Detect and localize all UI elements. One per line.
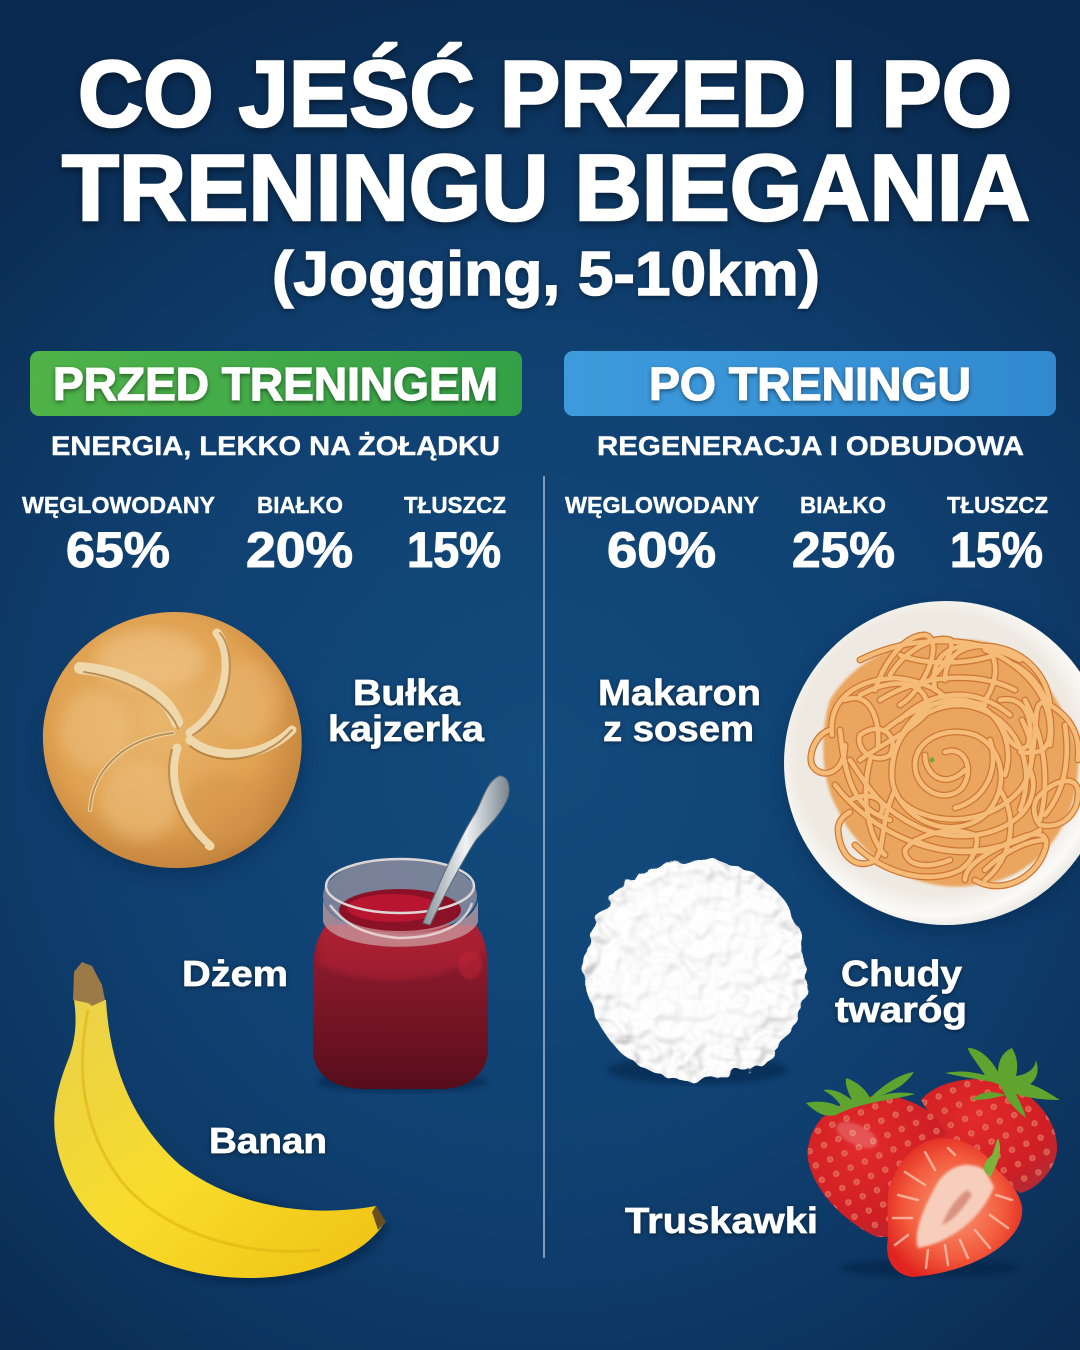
macro: tłuszcz 15%: 15% xyxy=(950,522,1043,578)
macro: białko 20%: BIAŁKO xyxy=(257,492,343,518)
macro: węglowodany 65% xyxy=(22,492,215,578)
cut berry xyxy=(887,1138,1022,1277)
label: truskawki: Truskawki xyxy=(625,1200,818,1241)
macro: węglowodany 60%: 60% xyxy=(607,522,716,578)
title: TRENINGU BIEGANIA xyxy=(62,135,1030,240)
panel: po treningu xyxy=(564,351,1080,1277)
description: po treningu: REGENERACJA I ODBUDOWA xyxy=(597,431,1024,461)
heading: po treningu: PO TRENINGU xyxy=(649,358,971,410)
left berry xyxy=(806,1072,947,1237)
macro: węglowodany 65%: 65% xyxy=(66,522,170,578)
divider xyxy=(543,476,545,1258)
macro: białko 25% xyxy=(792,492,895,578)
label: bułka kajzerka: Bułka xyxy=(353,672,461,713)
label: dżem: Dżem xyxy=(182,953,288,994)
macro: węglowodany 65%: WĘGLOWODANY xyxy=(22,492,215,518)
icon: truskawki xyxy=(806,1048,1060,1277)
label: makaron z sosem xyxy=(598,672,761,749)
description: przed treningiem: ENERGIA, LEKKO NA ŻOŁĄDKU xyxy=(51,431,500,461)
icon: talerz makaronu xyxy=(784,601,1080,932)
icon: bułka kajzerka xyxy=(43,612,303,875)
macro: węglowodany 60%: WĘGLOWODANY xyxy=(565,492,759,518)
title: CO JEŚĆ PRZED I PO xyxy=(78,41,1012,146)
heading: po treningu xyxy=(564,351,1056,416)
macro: tłuszcz 15%: TŁUSZCZ xyxy=(947,492,1048,518)
label: chudy twaróg: Chudy xyxy=(841,953,962,994)
right berry xyxy=(921,1048,1060,1193)
macro: tłuszcz 15%: 15% xyxy=(407,522,501,578)
label: banan: Banan xyxy=(209,1120,327,1161)
heading: przed treningiem: PRZED TRENINGEM xyxy=(53,358,498,410)
label: bułka kajzerka xyxy=(328,672,485,749)
label: makaron z sosem: z sosem xyxy=(603,708,754,749)
macro: białko 25%: 25% xyxy=(792,522,895,578)
icon: banan xyxy=(54,962,390,1285)
label: chudy twaróg xyxy=(835,953,967,1030)
label: bułka kajzerka: kajzerka xyxy=(328,708,485,749)
macro: węglowodany 60% xyxy=(565,492,759,578)
subtitle: (Jogging, 5-10km) xyxy=(272,240,820,309)
macro: tłuszcz 15% xyxy=(947,492,1048,578)
icon: chudy twaróg xyxy=(586,860,806,1084)
macro: białko 25%: BIAŁKO xyxy=(800,492,886,518)
macro: tłuszcz 15% xyxy=(404,492,506,578)
macro: tłuszcz 15%: TŁUSZCZ xyxy=(404,492,506,518)
label: chudy twaróg: twaróg xyxy=(835,989,967,1030)
icon: słoik dżemu xyxy=(313,776,509,1092)
macro: białko 20%: 20% xyxy=(246,522,353,578)
macro: białko 20% xyxy=(246,492,353,578)
panel: przed treningiem xyxy=(22,351,522,1285)
label: makaron z sosem: Makaron xyxy=(598,672,761,713)
title xyxy=(62,41,1030,240)
